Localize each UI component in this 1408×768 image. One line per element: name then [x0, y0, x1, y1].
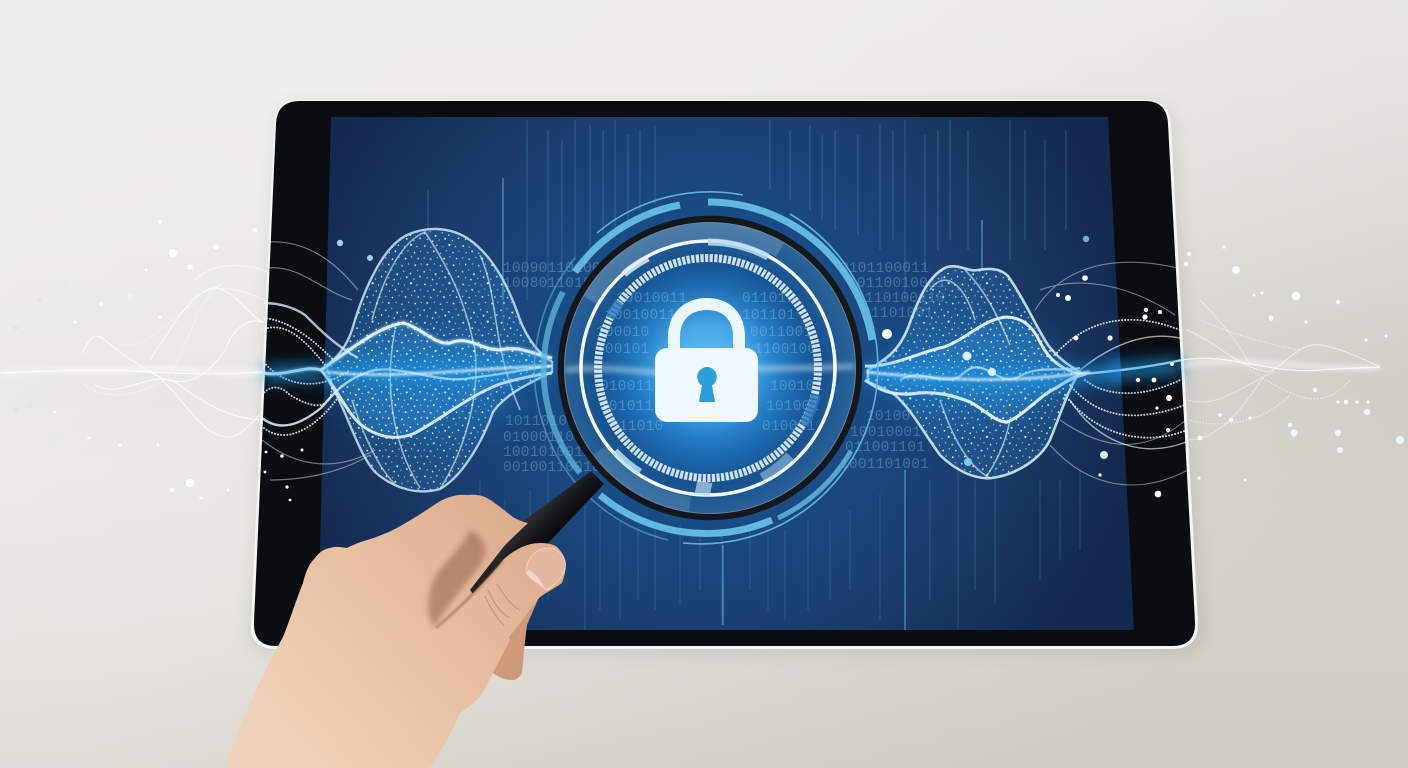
lens frame: [561, 219, 859, 517]
binary digits on the screen: 011001101: [845, 440, 925, 456]
beam crossing the lens: [565, 366, 855, 374]
binary digits inside the lens: 100101: [596, 342, 649, 358]
binary digits on the screen: 10010100110: [503, 445, 601, 461]
ring gaps: [610, 302, 816, 425]
right particles: [882, 236, 1404, 497]
binary digits inside the lens: 010011: [600, 379, 653, 395]
lock body: [655, 348, 758, 422]
finger crease shadow: [428, 530, 485, 628]
glow behind the lock: [650, 307, 766, 423]
left wave glow: [340, 340, 520, 430]
binary digits on the screen: 01000110001: [503, 430, 601, 446]
binary digits on the screen: [503, 261, 946, 476]
binary digits on the screen: 10110010011: [848, 276, 946, 292]
tablet device: [250, 100, 1204, 653]
binary digits on the screen: 1001101001: [840, 457, 929, 473]
nail highlight: [527, 570, 544, 587]
binary digits inside the lens: 011010: [610, 419, 663, 435]
right trailing wave over the background: [1182, 300, 1380, 440]
left wave inner strands: [262, 232, 552, 489]
right wave body: [868, 266, 1080, 478]
binary digits on the screen: 10110100101: [505, 414, 603, 430]
binary digits on the screen: 10080110101: [503, 276, 601, 292]
data rain: vertical lines on the screen: [428, 120, 1080, 630]
shackle: [674, 304, 739, 350]
left wave body: [321, 229, 552, 491]
central energy beam with glow: [300, 366, 1130, 380]
binary digits inside the lens: 011010: [742, 291, 795, 307]
right wave inner band: [868, 317, 1084, 422]
frosted upper-left lens sheen: [590, 231, 780, 300]
thin cyan arcs: [534, 192, 878, 544]
binary digits inside the lens: 010011: [762, 419, 815, 435]
floating particles: [14, 220, 1404, 501]
bezel beam glow: [264, 366, 1182, 374]
keyhole: [697, 367, 717, 402]
binary digits inside the lens: 101011: [600, 399, 653, 415]
binary digits on the screen: 10010001: [850, 425, 921, 441]
bright ring: [581, 241, 835, 495]
binary digits inside the lens: 10010011: [605, 308, 676, 324]
thick cyan arcs: [544, 202, 872, 534]
thumb: [407, 543, 566, 713]
barcode tick ring: [598, 258, 818, 478]
binary digits on the screen: 1110100110: [856, 291, 945, 307]
magnifying glass lens: [561, 219, 859, 517]
right wave glow: [885, 335, 1065, 415]
thumb upper edge shadow: [436, 560, 503, 628]
thumbnail: [527, 548, 565, 590]
binary digits on the screen: 00100110010: [503, 460, 601, 476]
binary digits inside the lens: 10010011: [616, 291, 687, 307]
lower fingers behind the thumb: [470, 590, 542, 690]
binary digits on the screen: 10090110100: [503, 261, 601, 277]
binary digits inside the lens: 0011001: [750, 325, 812, 341]
left trailing wave over the background: [0, 265, 268, 437]
left wave inner band: [321, 323, 552, 437]
binary digits inside the lens: [596, 291, 823, 435]
thumb knuckle wrinkles: [485, 584, 520, 626]
hand and fingers: [225, 495, 528, 768]
right data wave: [865, 262, 1188, 485]
pale accent arcs on ring: [615, 242, 790, 490]
padlock icon: [655, 304, 758, 422]
binary digits inside the lens: 100010: [596, 325, 649, 341]
binary digits inside the lens: 101001: [766, 399, 819, 415]
right wave inner strands: [865, 262, 1188, 485]
binary digits inside the lens: 1100100: [754, 342, 816, 358]
binary digits on the screen: 01101001: [862, 306, 933, 322]
left data wave: [262, 229, 552, 491]
left particles: [14, 220, 373, 501]
holographic rings around the lens: [534, 192, 878, 544]
binary digits inside the lens: 100101: [770, 379, 823, 395]
binary digits on the screen: 0101100011: [840, 261, 929, 277]
hand holding the magnifier: [225, 471, 604, 768]
binary digits inside the lens: 101101: [742, 308, 795, 324]
magnifier handle: [428, 471, 604, 632]
binary digits on the screen: 10100: [866, 409, 911, 425]
tablet screen: [318, 117, 1134, 630]
